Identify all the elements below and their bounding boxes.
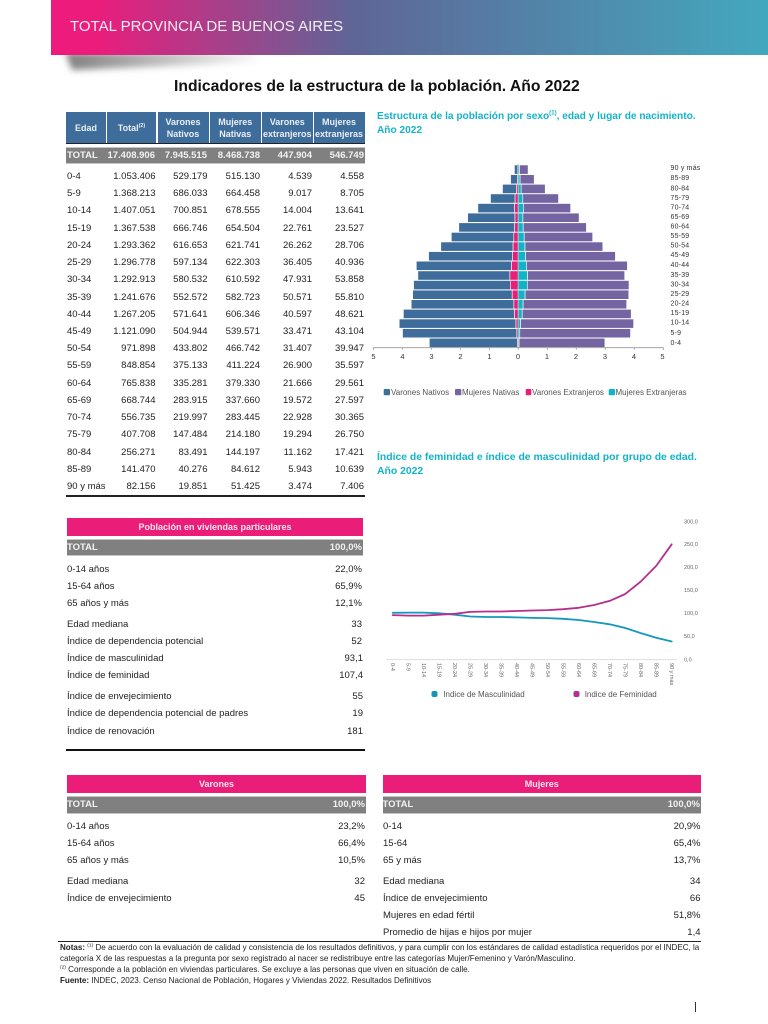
table age rows: 27.597 [335,395,364,406]
varones total row [67,796,366,814]
pyramid age labels: 85-89 [670,175,689,182]
pyramid age labels [670,165,701,347]
table age rows: 580.532 [173,274,208,285]
varones total row: 100,0% [333,799,365,810]
table age rows: 28.706 [335,240,364,251]
masculinity index line [393,613,672,642]
varones index rows: 32 [354,876,365,886]
table age rows: 283.915 [173,395,208,406]
pyramid age labels: 35-39 [670,272,689,279]
header banner [51,0,768,55]
table age rows: 597.134 [173,257,208,268]
mujeres index rows: Edad mediana [383,876,444,886]
aging rows: 181 [347,726,363,736]
table age rows: 622.303 [226,257,260,268]
table age rows: 621.741 [226,240,260,251]
table age rows: 1.368.213 [113,188,156,199]
x axis age labels: 65-69 [590,663,596,677]
varones age rows: 23,2% [338,820,365,832]
mujeres index rows: Mujeres en edad fértil [383,910,474,920]
table age rows: 1.292.913 [113,274,156,285]
aging rows: Índice de dependencia potencial de padres [67,708,248,719]
table age rows: 75-79 [67,429,91,440]
x axis age labels: 15-19 [436,663,442,677]
page number mark [695,1002,696,1012]
aging rows: Índice de envejecimiento [67,690,172,702]
y axis labels: 0,0 [684,657,692,663]
mujeres index rows: 51,8% [674,910,700,920]
y axis labels [684,519,698,663]
footnotes [60,943,700,985]
table age rows: 1.296.778 [113,257,156,268]
varones index rows: Índice de envejecimiento [67,892,172,904]
footnotes: Notas: (1) De acuerdo con la evaluación de calidad y consistencia de los resultados definitivos, y para cumplir con los estándares de calidad estadística requeridos por el INDEC, la [60,943,699,952]
table age rows: 335.281 [173,378,208,389]
index rows: Índice de dependencia potencial [67,636,203,646]
mujeres index rows: 66 [690,892,700,904]
table header row [66,112,365,144]
table age rows: 40.936 [335,257,364,268]
table age rows: 256.271 [121,446,156,458]
table age rows: 84.612 [231,464,260,475]
aging rows [67,690,363,736]
y axis labels: 150,0 [684,588,698,594]
table age rows: 36.405 [283,257,312,268]
total row [67,538,363,556]
line chart legend: Indice de Masculinidad [443,690,525,699]
index rows: Índice de feminidad [67,670,149,680]
table age rows: 40.597 [283,309,312,320]
table age rows: 82.156 [126,481,156,492]
table age rows: 666.746 [173,223,208,234]
x axis age labels: 5-9 [404,663,410,671]
pyramid x axis: 5 [660,352,665,361]
mujeres age rows: 0-14 [383,820,402,832]
table age rows: 43.104 [335,326,364,337]
pyramid age labels: 50-54 [670,242,689,250]
table age rows: 20-24 [67,240,91,251]
table age rows: 678.555 [226,205,260,216]
main title: Indicadores de la estructura de la población. Año 2022 [174,78,580,95]
pyramid age labels: 65-69 [670,214,689,221]
pyramid age labels: 70-74 [670,204,689,212]
mujeres age rows: 15-64 [383,838,407,848]
table age rows: 214.180 [226,429,260,440]
population pyramid chart [371,164,701,397]
y axis labels: 100,0 [684,611,698,617]
y axis labels: 50,0 [684,634,695,640]
table age rows: 616.653 [173,240,208,251]
varones age rows: 10,5% [338,854,365,866]
table age rows: 45-49 [67,326,91,337]
table age rows: 19.572 [283,395,312,406]
table age rows: 50.571 [283,292,312,303]
mujeres index rows [383,876,700,938]
table age rows: 664.458 [226,188,260,199]
table age rows: 375.133 [173,360,208,371]
table age rows: 407.708 [121,429,156,440]
table age rows: 10.639 [335,464,364,475]
age group rows: 12,1% [335,598,362,608]
x axis age labels: 30-34 [482,663,488,677]
table: population by age, sex and origin [66,112,365,497]
banner shadow [62,55,250,74]
pyramid age labels: 10-14 [670,320,689,326]
table age rows: 30.365 [335,412,364,423]
pyramid legend [384,388,687,397]
table header row: Total(2) [118,122,145,132]
table age rows: 50-54 [67,343,91,354]
pyramid age labels: 80-84 [670,186,689,192]
table age rows: 765.838 [121,378,156,389]
table age rows: 51.425 [231,481,260,492]
table age rows: 1.367.538 [113,223,156,234]
x axis age labels: 70-74 [606,663,612,677]
footnotes: categoría X de las respuestas a la pregunta por sexo registrado al nacer se redistribuye entre las categorías Mujer/Femenino y Varón/Masculino. [60,954,576,963]
pyramid x axis: 3 [429,352,434,361]
pyramid x axis: 4 [632,352,636,361]
table age rows: 23.527 [335,223,364,234]
x axis age labels: 80-84 [637,663,643,677]
varones heading: Varones [199,779,234,789]
table age rows: 379.330 [226,378,260,389]
varones age rows: 65 años y más [67,854,129,866]
line chart legend [432,690,657,699]
pyramid x axis: 1 [545,352,549,361]
table age rows: 10-14 [67,205,91,216]
table age rows: 5.943 [288,464,312,475]
mujeres age rows: 20,9% [674,820,700,832]
table age rows: 25-29 [67,257,91,268]
table age rows: 40.276 [178,464,208,475]
table age rows: 466.742 [226,343,260,354]
x axis age labels: 40-44 [513,663,519,677]
table age rows: 8.705 [340,188,364,199]
varones age rows [67,820,365,866]
table age rows: 1.121.090 [113,326,156,337]
pyramid age labels: 55-59 [670,233,689,240]
mujeres age rows [383,820,700,866]
x axis age labels: 90 y más [668,663,674,686]
table age rows: 85-89 [67,464,91,475]
pyramid x axis: 0 [516,352,520,361]
x axis age labels: 35-39 [498,663,504,677]
varones heading [67,775,366,793]
table age rows: 515.130 [226,171,260,182]
table age rows: 1.293.362 [113,240,156,251]
table age rows: 337.660 [226,395,260,406]
table total row: 447.904 [278,150,312,160]
mujeres index rows: 34 [690,876,700,886]
y axis labels: 300,0 [684,519,698,525]
y axis labels: 200,0 [684,565,698,571]
table age rows: 433.802 [173,343,208,354]
x axis age labels: 75-79 [622,663,628,677]
age group rows: 22,0% [335,564,362,574]
table age rows: 22.928 [283,412,312,423]
table age rows: 35.597 [335,360,364,371]
pyramid age labels: 75-79 [670,195,689,202]
mujeres heading [382,775,701,793]
table age rows: 80-84 [67,446,91,458]
table age rows: 571.641 [173,309,208,320]
aging rows: 19 [352,708,363,719]
line chart title [377,451,697,476]
table age rows: 29.561 [335,378,364,389]
table total row [66,146,365,164]
pyramid age labels: 20-24 [670,300,689,308]
y axis labels: 250,0 [684,542,698,548]
varones index rows: 45 [354,892,365,904]
table total row: 546.749 [330,150,364,160]
varones index rows: Edad mediana [67,876,128,886]
age group rows: 15-64 años [67,580,115,592]
aging rows: 55 [352,690,363,702]
mujeres index rows: Promedio de hijas e hijos por mujer [383,927,532,938]
table header row: Mujeres [218,116,252,126]
table age rows: 0-4 [67,171,81,182]
pyramid age labels: 0-4 [670,340,681,347]
table age rows [67,171,364,492]
table age rows: 1.407.051 [113,205,156,216]
table age rows: 147.484 [173,429,208,440]
table age rows: 700.851 [173,205,208,216]
table header row: Nativos [167,128,199,138]
aging rows: Índice de renovación [67,726,155,736]
table age rows: 1.267.205 [113,309,156,320]
table total row: 8.468.738 [218,150,260,160]
table header row: Nativas [219,128,251,138]
table age rows: 47.931 [283,274,312,285]
pyramid x axis: 1 [487,352,492,361]
table age rows: 14.004 [283,205,312,216]
table age rows: 1.053.406 [113,171,156,182]
table age rows: 141.470 [121,464,156,475]
table age rows: 144.197 [226,446,260,458]
panel: varones [67,775,366,904]
table age rows: 4.539 [288,171,312,182]
table age rows: 21.666 [283,378,312,389]
pyramid age labels: 40-44 [670,262,689,269]
table age rows: 55-59 [67,360,91,371]
table age rows: 529.179 [173,171,208,182]
table age rows: 848.854 [121,360,156,371]
varones index rows [67,876,365,904]
table age rows: 65-69 [67,395,91,406]
mujeres total row: 100,0% [668,799,700,810]
table age rows: 40-44 [67,309,91,320]
table age rows: 5-9 [67,188,81,199]
pyramid x axis: 2 [574,352,578,361]
index rows: 107,4 [339,670,363,680]
table age rows: 60-64 [67,378,91,389]
table header row: Edad [75,122,97,132]
age group rows: 65 años y más [67,598,129,608]
x axis age labels: 85-89 [652,663,658,677]
table age rows: 9.017 [288,188,312,199]
total row: 100,0% [330,542,362,552]
table age rows: 686.033 [173,188,208,199]
pyramid x axis: 4 [400,352,405,361]
pyramid x axis [371,348,665,361]
table age rows: 283.445 [226,412,260,423]
x axis age labels: 20-24 [451,663,457,677]
pyramid age labels: 15-19 [670,310,689,317]
table age rows: 39.947 [335,343,364,354]
x axis age labels: 55-59 [560,663,566,677]
varones age rows: 66,4% [338,838,365,848]
table age rows: 90 y más [67,481,106,492]
pyramid age labels: 90 y más [670,165,701,172]
x axis age labels: 0-4 [389,663,395,671]
pyramid x axis: 3 [603,352,607,361]
table age rows: 26.750 [335,429,364,440]
mujeres total row [382,796,701,814]
table age rows: 30-34 [67,274,91,285]
mujeres age rows: 13,7% [674,854,700,866]
line chart legend: Indice de Feminidad [585,690,657,699]
panel: mujeres [382,775,701,938]
pyramid x axis: 5 [371,352,376,361]
varones total row: TOTAL [67,799,98,810]
table age rows: 55.810 [335,292,364,303]
pyramid x axis: 2 [458,352,463,361]
pyramid age labels: 60-64 [670,224,689,230]
table total row: 17.408.906 [107,150,155,160]
pyramid bars [399,165,634,347]
table age rows: 26.900 [283,360,312,371]
table age rows: 17.421 [335,446,364,458]
mujeres heading: Mujeres [525,779,559,789]
table age rows: 582.723 [226,292,260,303]
x axis age labels: 60-64 [575,663,581,677]
pyramid legend: Varones Extranjeros [532,388,604,397]
table age rows: 552.572 [173,292,208,303]
age group rows: 0-14 años [67,564,109,574]
femininity index line [393,544,672,616]
footnotes: (2) Corresponde a la población en viviendas particulares. Se excluye a las personas que viven en situación de calle. [60,965,470,974]
table age rows: 504.944 [173,326,208,337]
table age rows: 411.224 [226,360,260,371]
panel: población en viviendas particulares [66,518,365,751]
mujeres index rows: Índice de envejecimiento [383,892,488,904]
age group rows: 65,9% [335,580,362,592]
panel heading: Población en viviendas particulares [138,522,292,532]
pyramid legend: Mujeres Extranjeras [616,388,687,397]
table age rows: 83.491 [178,446,208,458]
table total row: TOTAL [67,150,98,160]
table age rows: 4.558 [340,171,364,182]
table age rows: 48.621 [335,309,364,320]
index rows: Índice de masculinidad [67,652,164,664]
table age rows: 33.471 [283,326,312,337]
varones age rows: 15-64 años [67,838,115,848]
x axis age labels: 25-29 [466,663,472,677]
mujeres total row: TOTAL [382,799,413,810]
pyramid age labels: 5-9 [670,330,681,337]
x axis age labels: 45-49 [528,663,534,677]
mujeres age rows: 65,4% [674,838,700,848]
table age rows: 539.571 [226,326,260,337]
pyramid age labels: 45-49 [670,252,689,259]
table header row: Varones [165,116,201,126]
table age rows: 19.851 [178,481,208,492]
index rows [67,618,363,680]
varones age rows: 0-14 años [67,820,109,832]
table age rows: 70-74 [67,412,91,423]
table age rows: 26.262 [283,240,312,251]
table age rows: 1.241.676 [113,292,156,303]
table age rows: 668.744 [121,395,156,406]
panel heading [67,518,363,536]
table age rows: 3.474 [288,481,312,492]
index rows: 52 [351,636,362,646]
footnotes: Fuente: INDEC, 2023. Censo Nacional de Población, Hogares y Viviendas 2022. Resultados Definitivos [60,976,431,985]
pyramid legend: Mujeres Nativas [462,388,519,397]
table age rows: 654.504 [226,223,260,234]
table age rows: 53.858 [335,274,364,285]
table age rows: 610.592 [226,274,260,285]
table age rows: 606.346 [226,309,260,320]
pyramid age labels: 25-29 [670,291,689,298]
table age rows: 11.162 [284,446,312,458]
banner title: TOTAL PROVINCIA DE BUENOS AIRES [70,18,343,35]
index rows: 93,1 [344,652,363,664]
index rows: 33 [351,618,362,630]
pyramid chart title: Año 2022 [377,124,422,136]
table total row: 7.945.515 [165,150,207,160]
x axis age labels [389,663,674,686]
table age rows: 556.735 [121,412,156,423]
table header row: Varones [270,116,305,126]
line chart: femininity and masculinity index [386,519,698,699]
line chart title: Año 2022 [377,466,423,476]
mujeres age rows: 65 y más [383,854,422,866]
pyramid chart title: Estructura de la población por sexo(1), edad y lugar de nacimiento. [377,110,696,122]
table age rows: 22.761 [283,223,312,234]
table age rows: 19.294 [283,429,312,440]
line chart title: Índice de feminidad e índice de masculinidad por grupo de edad. [377,452,697,463]
mujeres index rows: 1,4 [687,927,700,938]
x axis age labels: 10-14 [420,663,426,677]
table age rows: 35-39 [67,292,91,303]
pyramid chart title [377,110,696,136]
table header row: Mujeres [322,116,356,126]
index rows: Edad mediana [67,618,128,630]
table header row: extranjeros [263,128,312,138]
table age rows: 13.641 [335,205,364,216]
x axis age labels: 50-54 [544,663,550,677]
table age rows: 7.406 [340,481,364,492]
table age rows: 971.898 [121,343,156,354]
table header row: extranjeras [315,128,363,138]
table age rows: 15-19 [67,223,91,234]
total row: TOTAL [67,542,98,552]
pyramid legend: Varones Nativos [391,388,449,397]
table age rows: 219.997 [173,412,208,423]
table age rows: 31.407 [283,343,312,354]
age group rows [67,564,362,608]
pyramid age labels: 30-34 [670,282,689,288]
